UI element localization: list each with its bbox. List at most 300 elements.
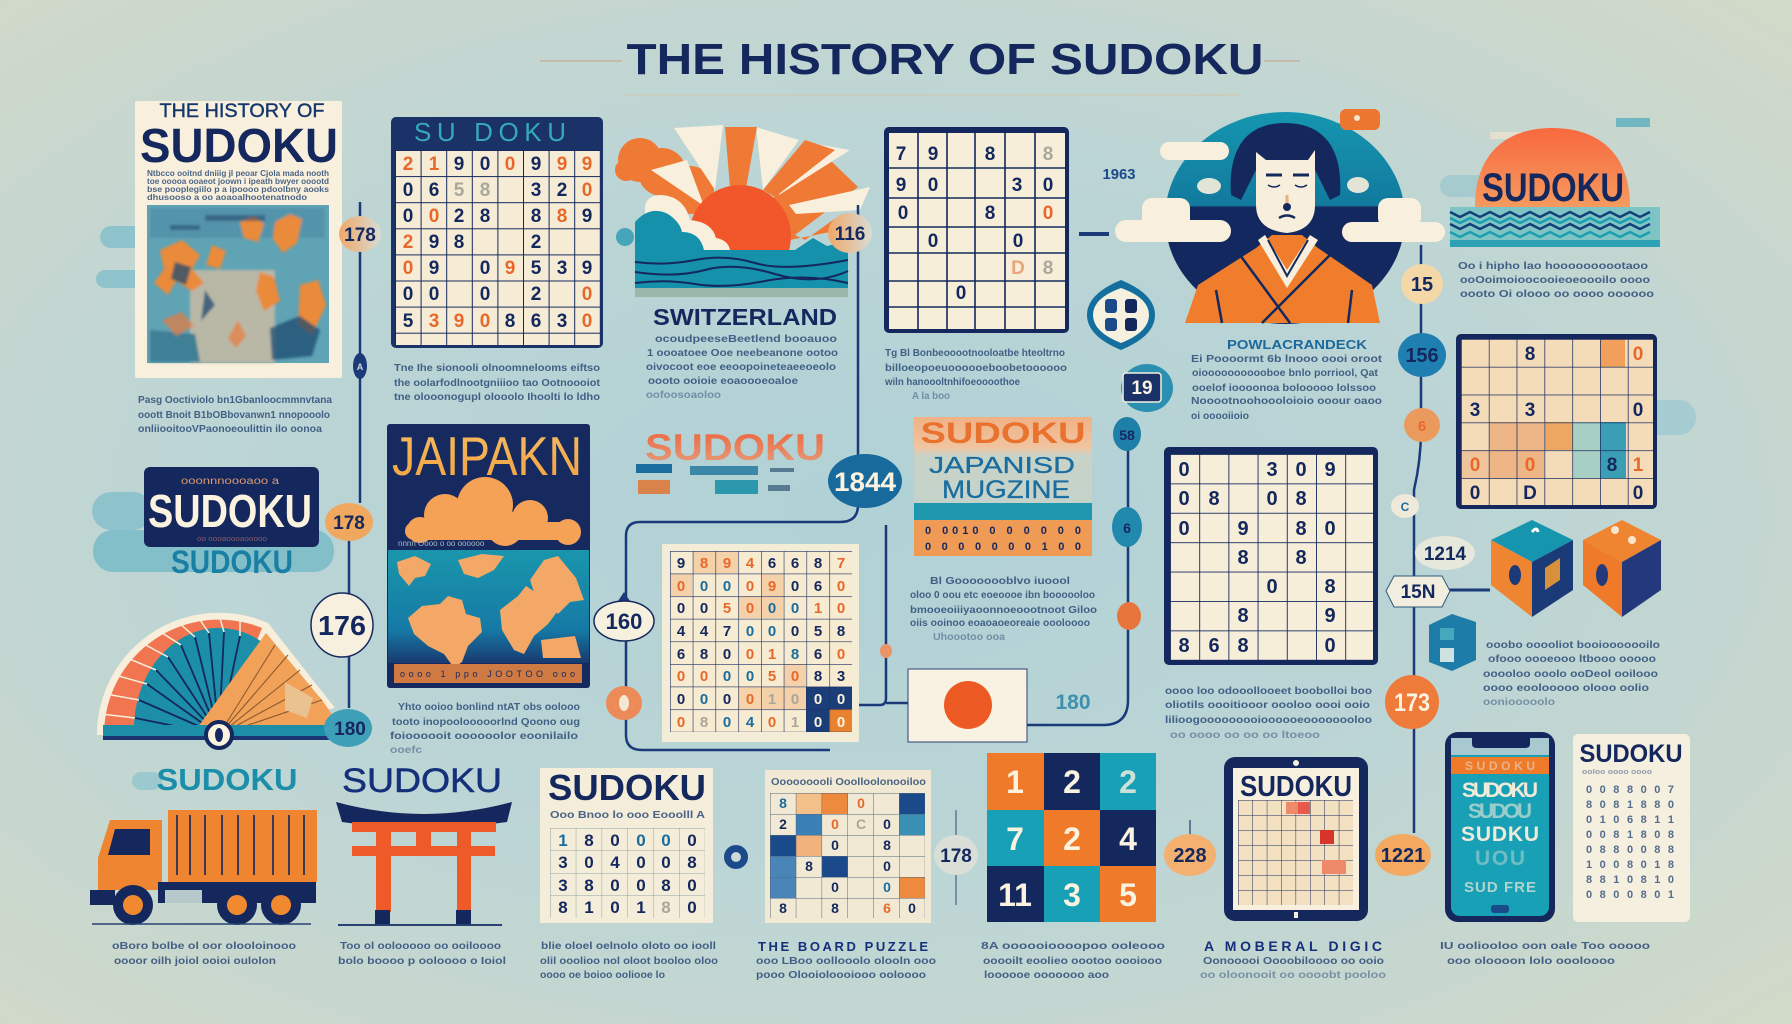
dense grid digits: 9	[768, 578, 776, 595]
banner: dark sudoku label: SUDOKU	[148, 485, 312, 537]
puzzle one digits: 8	[557, 206, 567, 227]
badge: 116	[828, 213, 872, 253]
large grid digits: 8	[1295, 488, 1307, 510]
badge: 178 lower: 178	[333, 513, 365, 534]
sparse grid digits: 0	[1013, 231, 1023, 252]
text block: sun logo: ooOoimoioocooieoeoooilo oooo	[1460, 275, 1650, 286]
badge: blue small	[1112, 507, 1142, 547]
text block: dice: ooooloo ooolo ooDeol ooilooo	[1483, 669, 1658, 680]
puzzle one digits: 9	[505, 258, 515, 279]
banner: dark sudoku label	[92, 467, 334, 580]
decorative blob right	[1640, 400, 1696, 435]
dense grid digits: 0	[791, 668, 799, 685]
tablet highlights	[1286, 802, 1346, 874]
orange tag	[1340, 109, 1380, 130]
sparse grid digits: 9	[928, 144, 938, 165]
dense grid digits: 6	[677, 646, 685, 663]
dense grid digits: 0	[837, 714, 845, 731]
panel: large sudoku grid	[1164, 447, 1378, 665]
illustration: sun with sudoku logo	[1440, 118, 1660, 247]
panel: newspaper	[135, 101, 342, 378]
text block: truck: oooor oilh joiol ooioi oulolon	[114, 956, 276, 967]
panel: orange japanese magazine: 0 0 0 0 0 0 0 1 0 0	[925, 541, 1081, 553]
kimono	[1185, 235, 1380, 323]
text block under sparse grid	[884, 348, 1067, 402]
puzzle one digits: 5	[531, 258, 542, 279]
logo: red sudoku	[636, 427, 825, 494]
icon: orange die	[1583, 520, 1661, 617]
badge: 156	[1398, 333, 1446, 377]
puzzle one digits: 9	[582, 154, 592, 175]
card digits: 0	[610, 876, 620, 895]
card digits: 1	[558, 831, 568, 850]
dense grid digits: 0	[837, 691, 845, 708]
dense grid digits: 5	[723, 600, 731, 617]
sparse grid digits: 0	[956, 283, 966, 304]
text block under newspaper: onliiooitooVPaonoeoulittin ilo oonoa	[138, 424, 322, 435]
text block under puzzle one: tne olooonogupl olooolo Ihoolti lo ldho	[394, 392, 600, 403]
coloured card digits: 8	[779, 900, 787, 916]
card digits: 0	[687, 876, 697, 895]
panel: coloured sudoku card: Ooooooooli Ooolloolonooiloo	[771, 777, 926, 788]
large grid digits: 0	[1178, 459, 1190, 481]
puzzle one digits: 2	[531, 284, 541, 305]
badge: 178 top: 178	[344, 225, 376, 246]
puzzle one digits: 0	[429, 206, 439, 227]
icon: small connector	[724, 845, 748, 869]
badge: 1844	[828, 454, 902, 508]
dense grid digits: 9	[723, 555, 731, 572]
badge: 180 fan: 180	[334, 719, 366, 740]
sparse grid digits: 7	[896, 144, 906, 165]
panel: dense sudoku grid	[662, 544, 859, 742]
coloured card digits: 8	[805, 858, 813, 874]
badge: 116: 116	[835, 224, 865, 245]
newspaper body text: bse pooplegiilo p a ipoooo pdoolbny aooks	[147, 185, 330, 194]
icon: blue die	[1491, 520, 1573, 617]
large grid digits: 8	[1178, 635, 1190, 657]
puzzle one digits: 5	[454, 180, 465, 201]
coloured card digits: 8	[883, 837, 891, 853]
panel: orange japanese magazine	[914, 417, 1092, 556]
text block: dice	[1483, 640, 1660, 708]
puzzle one digits: 8	[454, 232, 464, 253]
badge: small orange	[606, 686, 642, 720]
newspaper body text: Ntbcco ooitnd dniiig jl peoar Cjola mada nooth	[147, 169, 329, 178]
text block under cover	[390, 702, 580, 756]
puzzle one digits: 0	[582, 311, 592, 332]
puzzle one digits: 6	[531, 311, 541, 332]
icon: phone: SUDOKU	[1465, 759, 1535, 773]
phone text: SUDKU	[1461, 823, 1539, 846]
connector: dice	[1445, 588, 1490, 592]
badge: 173	[1385, 675, 1439, 729]
puzzle one digits: 9	[557, 154, 567, 175]
text block: truck: oBoro bolbe ol oor olooloinooo	[112, 941, 296, 952]
puzzle one digits: 9	[582, 258, 592, 279]
card digits: 8	[584, 831, 594, 850]
illustration: folding fan	[97, 613, 335, 748]
dense grid digits: 0	[837, 646, 845, 663]
badge: 15	[1401, 264, 1443, 304]
card digits: 3	[558, 853, 568, 872]
portrait: figure in kimono	[1115, 109, 1445, 324]
block numbers: 2	[1063, 821, 1081, 857]
timeline: magazine vertical	[1027, 450, 1128, 725]
badge: small marker: A	[357, 362, 364, 372]
banner: dark sudoku label: oo nooaoooaooooo	[197, 536, 267, 543]
badge: 15M: 15N	[1401, 582, 1435, 603]
world map	[388, 550, 589, 668]
puzzle one digits: 0	[480, 284, 490, 305]
panel: sparse sudoku grid	[884, 127, 1069, 333]
card digits: 8	[558, 898, 568, 917]
dense grid digits: 3	[837, 668, 845, 685]
dense grid digits: 8	[791, 646, 799, 663]
text block: mobile digital: A MOBERAL DIGIC	[1204, 938, 1382, 954]
decorative side blobs left	[96, 226, 150, 288]
magazine title: MUGZINE	[942, 476, 1070, 504]
card digits: 0	[661, 831, 671, 850]
text block: switzerland: oooto ooioie eoaoooeoaloe	[648, 376, 799, 387]
sparse grid digits: 0	[928, 175, 938, 196]
dense grid digits: 7	[723, 623, 731, 640]
coloured card digits: 0	[857, 795, 865, 811]
badge: orange marker	[1404, 408, 1440, 442]
cover footer: oooo 1 ppo JOOTOO ooo	[400, 669, 575, 679]
puzzle one digits: 2	[557, 180, 567, 201]
title: THE HISTORY OF SUDOKU	[626, 35, 1264, 84]
banner: dark sudoku label: SUDOKU	[171, 544, 293, 580]
large grid digits: 0	[1266, 576, 1278, 598]
newspaper body text: dhusooso a oo aoaoalhootenatnodo	[147, 193, 307, 202]
heading: teal sudoku: SUDOKU	[156, 762, 298, 797]
badge: 19	[1121, 364, 1173, 412]
banner: dark sudoku label: ooonnnoooaoo a	[181, 476, 280, 487]
panel: printed sudoku sheet	[1573, 734, 1690, 922]
panel: peach sudoku grid	[1456, 334, 1657, 509]
dense grid digits: 0	[746, 600, 754, 617]
puzzle one digits: 9	[429, 258, 439, 279]
text block: portrait: Ei Poooormt 6b lnooo oooi oroot	[1191, 354, 1383, 365]
text block: sheet: IU ooliooloo oon oale Too ooooo	[1440, 941, 1650, 952]
text block under large grid: lilioogooooooooioooooeoooooooloo	[1165, 715, 1372, 726]
peach grid digits: 0	[1633, 400, 1643, 421]
dense grid digits: 0	[723, 668, 731, 685]
phone text	[1461, 779, 1539, 896]
puzzle one digits: 0	[582, 284, 592, 305]
badge: 1221: 1221	[1381, 845, 1425, 867]
dense grid digits: 4	[677, 623, 686, 640]
text block: truck	[112, 941, 296, 967]
card digits: 0	[610, 831, 620, 850]
text block: torii	[338, 941, 506, 967]
card digits: 8	[584, 876, 594, 895]
dense grid digits: 1	[814, 600, 822, 617]
text block: portrait: ooelof ioooonoa bolooooo lolssoo	[1192, 383, 1376, 394]
sparse grid digits: 0	[898, 203, 908, 224]
large grid digits: 0	[1178, 518, 1190, 540]
badge: 160	[594, 592, 654, 641]
heading: portrait: POWLACRANDECK	[1227, 337, 1368, 352]
icon: phone	[1445, 732, 1555, 922]
dense grid digits: 0	[746, 623, 754, 640]
panel: sudoku card: SUDOKU	[548, 767, 706, 808]
large grid digits: 3	[1266, 459, 1278, 481]
puzzle one digits: 0	[582, 180, 592, 201]
card digits: 4	[610, 853, 620, 872]
tinted cells	[1461, 339, 1626, 478]
card digits: 8	[687, 853, 697, 872]
panel: tablet	[1224, 757, 1368, 921]
text block: board puzzle: THE BOARD PUZZLE	[758, 939, 928, 954]
tinted cells	[770, 793, 925, 898]
dense grid digits: 0	[700, 691, 708, 708]
text block: portrait: oi ooooiioio	[1191, 411, 1249, 422]
coloured card digits: 8	[779, 795, 787, 811]
text block: sudoku card: blie oloel oelnolo oloto oo iooll	[541, 941, 716, 952]
dense grid digits: 7	[837, 555, 845, 572]
marker: small peach	[880, 644, 892, 658]
badge: 1844: 1844	[834, 467, 896, 497]
puzzle one digits: 0	[429, 284, 439, 305]
clouds	[1115, 142, 1445, 242]
coloured card digits: 0	[831, 816, 839, 832]
panel: coloured number blocks	[987, 753, 1156, 922]
sparse grid digits: 8	[985, 203, 995, 224]
peach grid digits: 0	[1525, 455, 1535, 476]
puzzle one digits: 2	[454, 206, 464, 227]
puzzle one digits: 0	[480, 311, 490, 332]
sparse grid digits: 8	[1043, 144, 1053, 165]
large grid digits: 9	[1324, 605, 1336, 627]
puzzle one digits: 9	[582, 206, 592, 227]
label: 180: 180	[1055, 691, 1091, 714]
coloured card digits: 0	[908, 900, 916, 916]
connector: centre loop	[626, 505, 858, 750]
dense grid digits: 0	[677, 668, 685, 685]
text block: board puzzle: pooo Olooioloooiooo ooloooo	[756, 970, 926, 981]
dense grid digits: 0	[791, 691, 799, 708]
block numbers: 1	[1006, 764, 1024, 800]
badge: 178 lower	[325, 503, 373, 541]
dense grid digits: 0	[723, 578, 731, 595]
text block under puzzle one: Tne Ihe sionooli olnoomnelooms eiftso	[394, 363, 600, 374]
puzzle one digits: 8	[505, 311, 515, 332]
coloured card digits: C	[856, 816, 866, 832]
hair	[1231, 123, 1340, 200]
peach grid digits: 0	[1470, 483, 1480, 504]
peach grid digits: 3	[1470, 400, 1480, 421]
puzzle one digits: 8	[531, 206, 541, 227]
cover title: JAIPAKN	[392, 425, 582, 487]
badge: 1214: 1214	[1424, 544, 1467, 565]
large grid digits: 8	[1208, 488, 1220, 510]
puzzle one digits: 6	[429, 180, 439, 201]
dense grid digits: 5	[768, 668, 776, 685]
dense grid digits: 6	[768, 555, 776, 572]
text block under cover: foioooooit oooooolor eoonilailo	[390, 731, 578, 742]
text block: mobile digital: Oonooooi Oooobiloooo oo ooio	[1203, 956, 1384, 967]
text block: switzerland: oivocoot eoe eeoopoineteaeeoeolo	[646, 362, 836, 373]
text block: number blocks: loooooe ooooooo aoo	[984, 970, 1109, 981]
large grid digits: 8	[1295, 547, 1307, 569]
puzzle one digits: 3	[557, 258, 567, 279]
dense grid digits: 8	[814, 668, 822, 685]
large grid digits: 0	[1324, 635, 1336, 657]
dense grid digits: 4	[746, 555, 755, 572]
block numbers: 5	[1119, 877, 1137, 913]
sparse grid digits: 0	[928, 231, 938, 252]
peach grid digits: 8	[1525, 344, 1535, 365]
card digits: 0	[610, 898, 620, 917]
puzzle one digits: 0	[480, 154, 490, 175]
text block under large grid: oliotils oooitiooor oooloo oooi ooio	[1165, 700, 1370, 711]
block numbers: 3	[1063, 877, 1081, 913]
large grid digits: 0	[1178, 488, 1190, 510]
panel: japan magazine cover: nnnn Oooo o oo oooooo	[398, 539, 485, 548]
card digits: 1	[636, 898, 646, 917]
dense grid digits: 1	[768, 646, 776, 663]
text block under sparse grid: billoeopoeuoooooeboobetoooooo	[885, 363, 1067, 374]
puzzle one digits: 0	[403, 180, 413, 201]
badge: 180 fan	[324, 709, 372, 747]
text block: switzerland	[646, 334, 838, 401]
sparse grid digits: 0	[1043, 175, 1053, 196]
text block under puzzle one: the oolarfodlnootgniiioo tao Ootnoooiot	[394, 378, 601, 389]
coloured card digits: 2	[779, 816, 787, 832]
block numbers: 11	[998, 877, 1032, 913]
text block under cover: tooto inopoolooooorlnd Qoono oug	[392, 717, 580, 728]
icon: truck	[90, 810, 317, 925]
sparse grid digits	[896, 144, 1053, 304]
dense grid digits: 0	[723, 714, 731, 731]
dense grid digits: 6	[814, 578, 822, 595]
panel: orange japanese magazine: 0 0010 0 0 0 0 0 0	[925, 525, 1081, 537]
peach grid digits: D	[1523, 483, 1537, 504]
large grid digits: 0	[1266, 488, 1278, 510]
badge: 176	[311, 593, 373, 657]
dense grid digits: 0	[677, 578, 685, 595]
text block: sudoku card: olil ooolioo nol oloot booloo oloo	[540, 956, 718, 967]
illustration: rising sun	[615, 125, 870, 297]
dense grid digits: 9	[677, 555, 685, 572]
dense grid digits: 0	[791, 600, 799, 617]
dense grid digits: 0	[700, 578, 708, 595]
dense grid digits: 0	[746, 578, 754, 595]
teal clouds	[616, 195, 848, 250]
panel: orange japanese magazine: SUDOKU	[920, 417, 1086, 450]
dense grid digits: 0	[677, 714, 685, 731]
magazine title: JAPANISD	[929, 452, 1075, 478]
sheet digit columns	[1586, 784, 1674, 901]
text block: portrait: Nooootnoohoooloioio ooour oaoo	[1191, 396, 1382, 407]
dense grid digits: 0	[723, 646, 731, 663]
badge: 15M	[1386, 576, 1450, 607]
large grid digits: 8	[1295, 518, 1307, 540]
puzzle one digits: 0	[480, 258, 490, 279]
panel: coloured sudoku card	[765, 770, 931, 923]
text block: sheet	[1440, 941, 1650, 967]
panel: printed sudoku sheet: SUDOKU	[1580, 740, 1682, 768]
block numbers: 2	[1119, 764, 1137, 800]
puzzle one digits: 9	[531, 154, 541, 175]
badge: 156: 156	[1405, 345, 1439, 367]
dense grid digits: 0	[677, 600, 685, 617]
timeline: right vertical	[1414, 245, 1421, 833]
tinted cells	[670, 551, 806, 709]
badge: small marker	[353, 353, 367, 379]
peach grid digits: 1	[1633, 455, 1644, 476]
text block under magazine: oiis ooinoo eoaoaoeoreaie oooloooo	[910, 618, 1090, 629]
panel: sudoku card	[540, 767, 713, 923]
sheet digit columns: 0 0 8 8 0 0 7	[1586, 784, 1674, 796]
peach grid digits	[1470, 344, 1644, 504]
large grid digits: 9	[1237, 518, 1249, 540]
badge: pale hex: C	[1401, 500, 1410, 514]
illustration: sun with sudoku logo: SUDOKU	[1482, 166, 1624, 210]
phone text: SUDOU	[1468, 800, 1532, 823]
text block: portrait: oiooooooooooboe bnlo porriool, Qat	[1192, 368, 1379, 379]
peach grid digits: 0	[1470, 455, 1480, 476]
card digits: 0	[636, 831, 646, 850]
text block: dice: ofooo oooeooo ltbooo ooooo	[1488, 654, 1656, 665]
badge: orange marker: 6	[1418, 418, 1426, 435]
cover footer	[394, 664, 582, 683]
puzzle one digits	[403, 154, 592, 332]
text block under magazine: oloo 0 oou etc eoeoooe ibn boooooloo	[910, 590, 1095, 601]
puzzle one digits: 2	[403, 232, 413, 253]
text block: portrait	[1191, 354, 1383, 422]
sparse grid digits: 3	[1012, 175, 1022, 196]
panel: printed sudoku sheet: ooloo oooo oooo	[1582, 769, 1652, 776]
badge: 178 pale: 178	[940, 846, 972, 867]
dense grid digits: 6	[814, 646, 822, 663]
puzzle one digits: 5	[403, 311, 414, 332]
puzzle one digits: 9	[454, 154, 464, 175]
text block under large grid	[1165, 686, 1372, 741]
sparse grid digits: D	[1011, 258, 1025, 279]
sheet digit columns: 0 8 0 0 8 0 1	[1586, 889, 1674, 901]
dense grid digits: 0	[700, 600, 708, 617]
icon: torii gate	[336, 802, 512, 925]
coloured card digits: 0	[883, 879, 891, 895]
sparse grid digits: 8	[1043, 258, 1053, 279]
dense grid digits: 0	[814, 691, 822, 708]
badge: pale hex	[1391, 494, 1419, 518]
puzzle one digits: 0	[403, 258, 413, 279]
dense grid digits: 0	[677, 691, 685, 708]
dense grid digits: 0	[746, 668, 754, 685]
dense grid digits: 4	[700, 623, 709, 640]
coloured card digits: 0	[831, 837, 839, 853]
peach grid digits: 0	[1633, 344, 1643, 365]
large grid digits: 8	[1324, 576, 1336, 598]
dense grid digits: 8	[837, 623, 845, 640]
card digits: 0	[584, 853, 594, 872]
heading: switzerland: SWITZERLAND	[653, 304, 837, 330]
card digits: 8	[661, 876, 671, 895]
dense grid digits: 8	[700, 555, 708, 572]
large grid digits: 0	[1295, 459, 1307, 481]
text block under magazine: Uhoootoo ooa	[933, 632, 1005, 643]
sheet digit columns: 0 1 0 6 8 1 1	[1586, 814, 1674, 826]
badge: 173: 173	[1394, 689, 1430, 717]
badge: 58: 58	[1119, 427, 1135, 443]
coloured card digits: 0	[831, 879, 839, 895]
panel: tablet: SUDOKU	[1240, 771, 1352, 803]
dense grid digits: 0	[768, 714, 776, 731]
